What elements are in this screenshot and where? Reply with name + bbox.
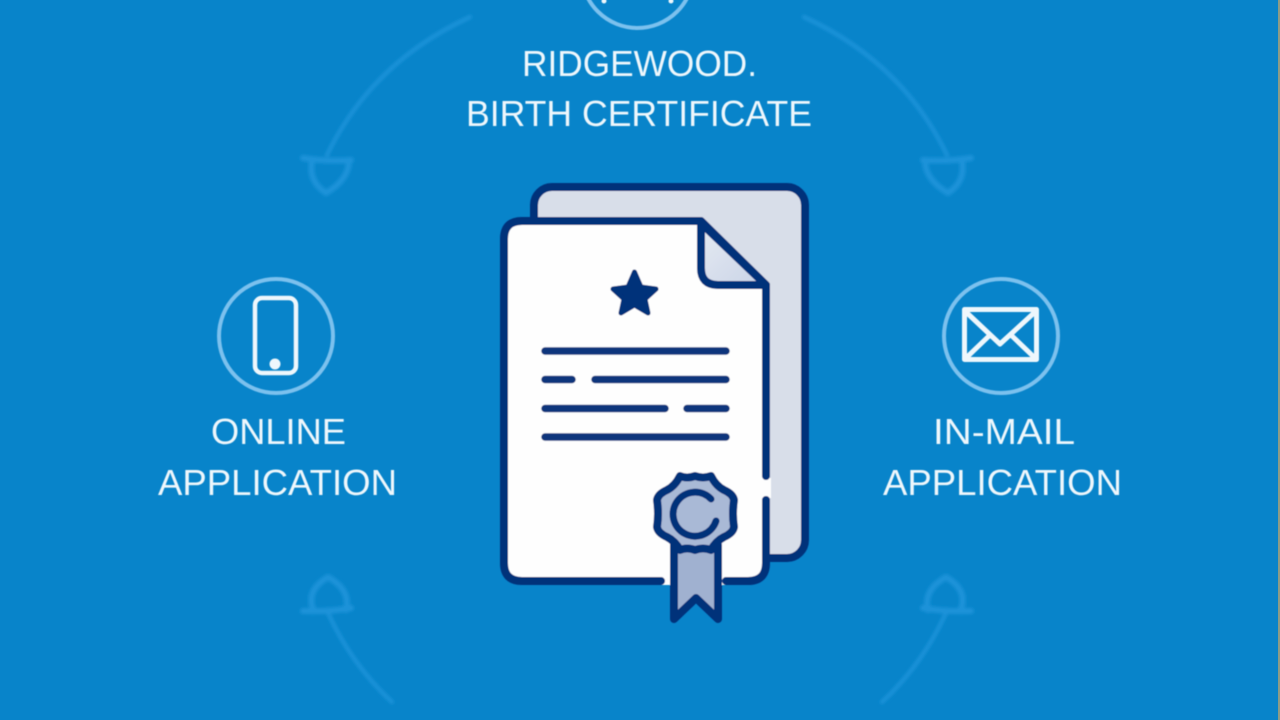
label: in-mail application: APPLICATION <box>883 462 1122 503</box>
faint decorative arrow: top right <box>804 17 971 193</box>
icon: phone in circle <box>219 279 333 393</box>
faint decorative arrow: top left <box>303 17 470 193</box>
icon: top circle, cropped by the page edge <box>582 0 694 28</box>
label: online application <box>158 411 397 503</box>
page fold <box>701 223 766 285</box>
star <box>613 272 656 313</box>
back page <box>534 187 805 558</box>
label: in-mail application <box>883 411 1122 503</box>
label: online application: APPLICATION <box>158 462 397 503</box>
icon: envelope in circle <box>944 279 1058 393</box>
title <box>466 43 812 134</box>
faint decorative arrow: bottom left <box>303 577 392 702</box>
label: online application: ONLINE <box>211 411 346 452</box>
text lines <box>545 351 726 437</box>
title: BIRTH CERTIFICATE <box>466 93 812 134</box>
label: in-mail application: IN-MAIL <box>933 411 1075 452</box>
faint decorative arrow: bottom right <box>882 577 971 702</box>
seal with letter C <box>657 476 734 550</box>
ribbon <box>674 545 718 619</box>
title: RIDGEWOOD. <box>522 43 757 84</box>
illustration: birth certificate document <box>504 187 805 619</box>
front page <box>504 221 771 585</box>
